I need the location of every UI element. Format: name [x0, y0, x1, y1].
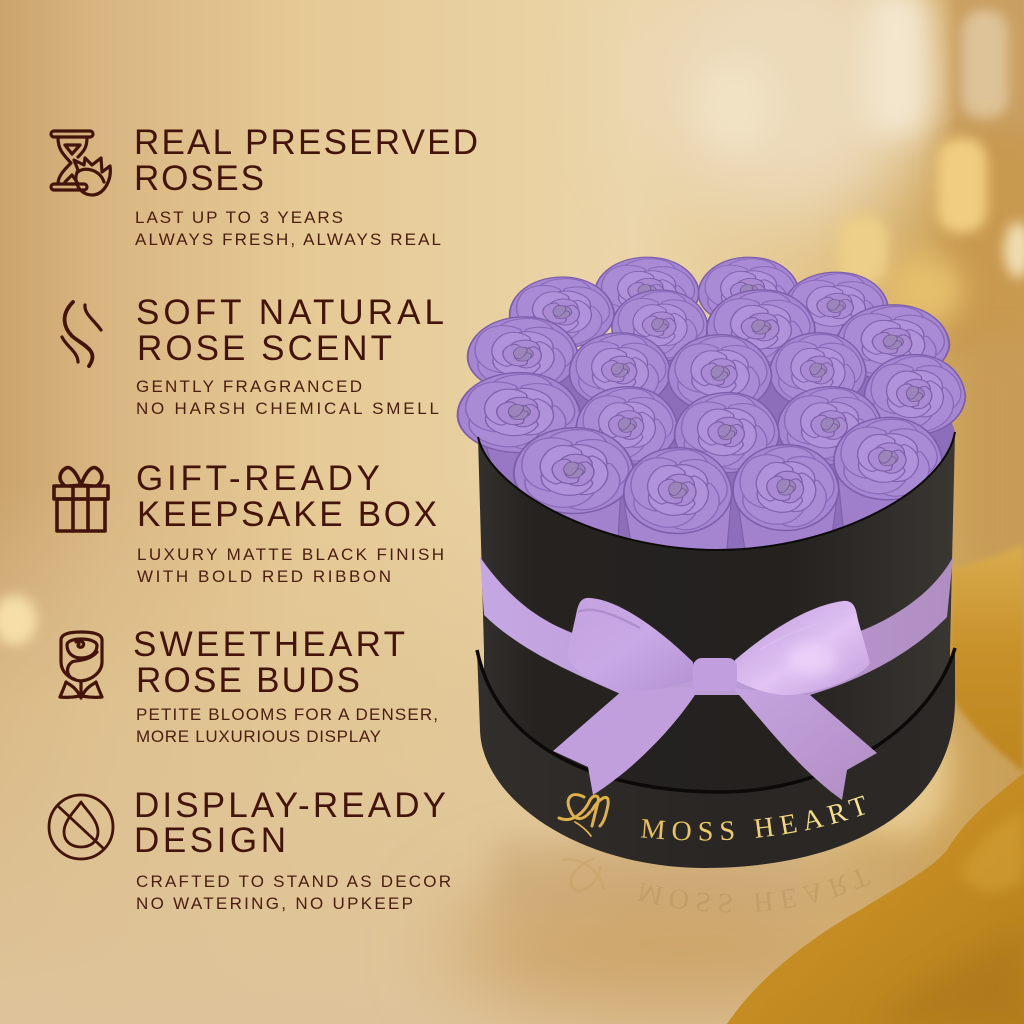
box body	[478, 432, 955, 810]
heading: SOFT NATURAL	[136, 293, 444, 332]
heading: ROSES	[134, 159, 264, 198]
feature: gift-ready keepsake box	[54, 459, 444, 586]
heading: ROSE BUDS	[136, 661, 360, 700]
bow knot	[693, 658, 737, 691]
heading: DESIGN	[134, 821, 286, 860]
description: WITH BOLD RED RIBBON	[137, 567, 391, 586]
ribbon tail right	[733, 688, 877, 800]
description: LUXURY MATTE BLACK FINISH	[137, 545, 444, 564]
box interior	[478, 334, 955, 552]
rose stems	[482, 430, 930, 560]
description: NO WATERING, NO UPKEEP	[136, 894, 413, 913]
heading: GIFT-READY	[136, 459, 380, 498]
description: GENTLY FRAGRANCED	[136, 377, 362, 396]
heading: DISPLAY-READY	[134, 786, 446, 825]
description: PETITE BLOOMS FOR A DENSER,	[136, 705, 438, 724]
heading: SWEETHEART	[133, 625, 405, 664]
icon: rose bud	[60, 632, 102, 698]
feature list	[49, 123, 478, 913]
feature: sweetheart rose buds	[60, 625, 438, 746]
heading: KEEPSAKE BOX	[137, 495, 437, 534]
description: MORE LUXURIOUS DISPLAY	[136, 727, 381, 746]
brand name: MOSS HEART	[640, 795, 866, 841]
description: CRAFTED TO STAND AS DECOR	[136, 872, 451, 891]
purple preserved roses	[456, 257, 967, 560]
gold silk drape	[727, 545, 1024, 1024]
bow loop left	[567, 598, 695, 691]
ribbon tail left	[553, 687, 700, 795]
product: black keepsake box	[456, 257, 967, 868]
feature: real preserved roses	[51, 123, 478, 249]
icon: gift box	[54, 468, 108, 531]
upper silk fold	[950, 545, 1024, 772]
description: NO HARSH CHEMICAL SMELL	[136, 399, 439, 418]
icon: scent waves	[62, 302, 101, 366]
box reflection on table: MOSS HEART	[637, 868, 870, 912]
heading: REAL PRESERVED	[134, 123, 478, 162]
lid band	[477, 648, 955, 868]
description: ALWAYS FRESH, ALWAYS REAL	[135, 230, 441, 249]
description: LAST UP TO 3 YEARS	[135, 208, 343, 227]
heading: ROSE SCENT	[137, 329, 392, 368]
icon: no-water symbol	[49, 795, 113, 859]
lavender bow	[553, 598, 877, 800]
icon: hourglass and rose	[51, 131, 110, 195]
lavender ribbon band	[480, 557, 953, 695]
bow loop right	[735, 601, 870, 695]
brand monogram	[559, 795, 608, 836]
feature: soft natural rose scent	[62, 293, 444, 418]
front silk fold	[727, 773, 1024, 1024]
feature: display-ready design	[49, 786, 451, 913]
box reflection on table	[562, 857, 870, 912]
